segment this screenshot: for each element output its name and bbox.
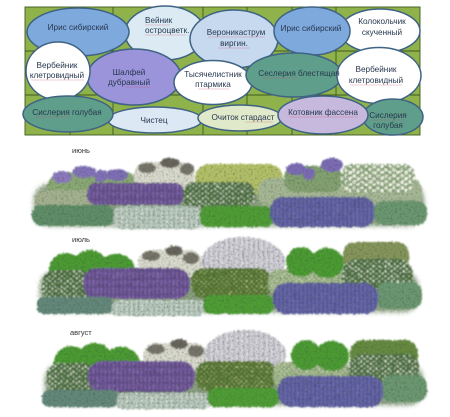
plant zone labels: Вейник — [145, 16, 173, 25]
plant zone labels: голубая — [373, 121, 403, 130]
planting plan panel — [23, 6, 423, 135]
plan grid background — [25, 7, 420, 135]
plant zone labels: виргин. — [220, 39, 248, 48]
white-flowered shrub — [183, 182, 255, 208]
plant zone labels: Сислерия голубая — [32, 108, 102, 117]
green sedum — [200, 206, 273, 227]
white shrub left — [47, 363, 97, 393]
salvia — [87, 183, 184, 205]
white shrub right — [342, 259, 413, 294]
green sedum — [203, 295, 274, 314]
plant zone labels: Чистец — [140, 116, 168, 125]
plant zone labels: Вербейник — [356, 65, 397, 74]
mid-left foliage — [34, 190, 104, 214]
olive shrub — [196, 361, 276, 391]
ornamental grass plumes — [134, 158, 194, 192]
plant zone: вейник — [125, 6, 205, 60]
plant zone: сеслерия блестящая — [246, 53, 342, 97]
spell-check underlines — [31, 25, 405, 122]
plant zone labels: Ирис сибирский — [48, 23, 108, 32]
plant zone: вероникаструм — [190, 10, 278, 68]
plant zone labels: Котовник фассена — [288, 108, 358, 117]
plant zone labels: клетровидный — [30, 71, 84, 80]
low right grass — [376, 282, 422, 309]
backing foliage — [45, 365, 423, 405]
salvia — [83, 268, 190, 299]
dark green top shrub — [350, 340, 418, 370]
white campanula — [341, 164, 415, 192]
plant zone: очиток — [198, 105, 282, 131]
plant zone: колокольчик — [340, 9, 420, 53]
month label: июль: июль — [72, 235, 90, 244]
backing foliage — [34, 184, 424, 226]
low grey grass — [42, 390, 118, 407]
low grey-green grass — [32, 205, 114, 226]
plant zone: тысячелистник — [174, 60, 252, 104]
plant zone labels: остроцветк. — [145, 26, 189, 35]
white shrub right — [349, 354, 419, 387]
yellow-green grass — [195, 164, 283, 194]
pale grass mid — [273, 362, 347, 388]
green sedum — [208, 388, 279, 407]
plant zone labels: клетровидный — [349, 76, 403, 85]
border illustration: июнь — [32, 158, 427, 229]
back-left green mounds — [54, 343, 140, 380]
plant zone labels: Ирис сибирский — [281, 24, 341, 33]
tall pale grass — [201, 237, 285, 287]
grass plumes — [138, 246, 202, 278]
stachys — [113, 206, 201, 229]
green mounds right — [286, 247, 344, 278]
plant zone: ирис сибирский, right — [274, 7, 350, 55]
plant zone labels: Шалфей — [113, 68, 145, 77]
plant zone: котовник — [278, 96, 368, 134]
plant zone labels: Колокольчик — [358, 17, 406, 26]
olive shrub — [191, 268, 271, 298]
month label: июнь: июнь — [72, 146, 90, 155]
back-right iris — [284, 158, 343, 192]
plant zone: вербейник, left — [26, 42, 90, 100]
grass plumes — [143, 339, 207, 371]
backing foliage — [40, 272, 418, 312]
back-left green mounds — [49, 250, 135, 287]
back-left iris — [48, 166, 138, 202]
low right grass — [374, 201, 427, 225]
lavender — [278, 376, 383, 407]
low right grass — [381, 375, 427, 402]
plant zone labels: Вероникаструм — [207, 28, 266, 37]
lavender — [270, 197, 375, 227]
plant zone: чистец — [108, 107, 202, 133]
plant zone labels: птармика — [195, 80, 231, 89]
plant zone: шалфей — [87, 49, 181, 105]
lavender — [273, 283, 378, 314]
white shrub left — [42, 270, 92, 300]
stachys — [117, 393, 209, 409]
yellow-white top shrub — [343, 242, 409, 270]
plant zone labels: дубравный — [108, 78, 150, 87]
salvia — [88, 361, 195, 392]
low grey grass — [37, 297, 113, 314]
plant zone labels — [30, 16, 407, 130]
plant zone labels: Сеслерия блестящая — [258, 69, 340, 78]
plant zone labels: Очиток стардаст — [211, 113, 275, 122]
border illustration: август — [42, 330, 427, 409]
plant zone: ирис сибирский, left — [27, 8, 129, 56]
tall pale grass — [204, 330, 286, 380]
right mid foliage — [258, 178, 422, 208]
plant zone labels: Тысячелистник — [184, 70, 242, 79]
border illustration: июль — [37, 237, 422, 316]
stachys — [112, 300, 204, 316]
plant zone labels: Вербейник — [37, 61, 78, 70]
month label: август: август — [70, 328, 92, 337]
plant zone: сеслерия голубая, left — [23, 96, 113, 132]
plant zone labels: Сислерия — [369, 111, 407, 120]
plant zone: сеслерия голубая, right — [363, 99, 423, 135]
plant zone labels: скученный — [362, 28, 402, 37]
green mounds right — [291, 340, 349, 371]
plant zone: вербейник, right — [337, 48, 421, 104]
pale grass mid — [268, 269, 342, 295]
